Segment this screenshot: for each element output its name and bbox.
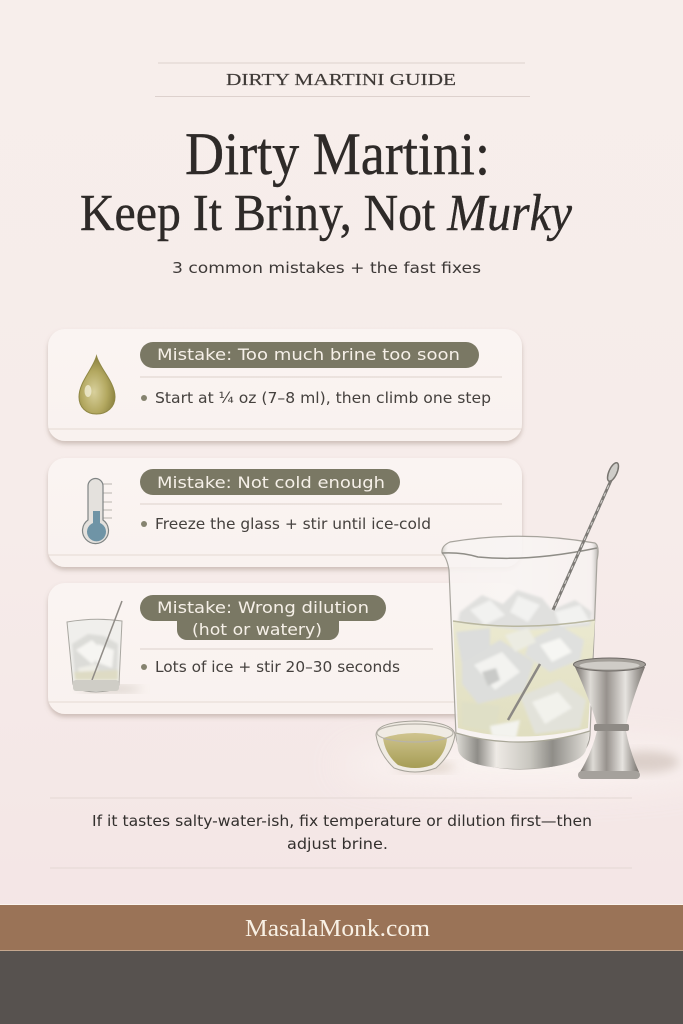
mistake pill 2 bbox=[140, 469, 400, 495]
footer note: adjust brine. bbox=[287, 835, 388, 853]
mixing glass bbox=[442, 536, 598, 769]
glass base bbox=[456, 731, 590, 769]
mistake pill 2: Mistake: Not cold enough bbox=[157, 473, 385, 492]
bar spoon bbox=[508, 461, 621, 720]
jigger bbox=[574, 658, 646, 779]
title: Dirty Martini: bbox=[185, 121, 490, 187]
panel: mistake 2, not cold enough bbox=[48, 458, 522, 567]
mistake pill 1 bbox=[140, 342, 479, 368]
fix text 3: Lots of ice + stir 20–30 seconds bbox=[155, 658, 400, 676]
mistake pill 3 bbox=[140, 595, 386, 640]
illustration: mixing glass, spoon, jigger and brine bowl bbox=[376, 461, 679, 779]
header label: Dirty Martini Guide: DIRTY MARTINI GUIDE bbox=[226, 70, 456, 89]
fix text 2: Freeze the glass + stir until ice-cold bbox=[155, 515, 431, 533]
ice cubes bbox=[456, 590, 592, 738]
panel: mistake 1, too much brine bbox=[48, 329, 522, 441]
dark footer bar bbox=[0, 951, 683, 1024]
icon: small mixing glass bbox=[67, 601, 142, 692]
mistake pill 1: Mistake: Too much brine too soon bbox=[157, 345, 460, 364]
icon: thermometer bbox=[83, 479, 112, 544]
mistake pill 3: Mistake: Wrong dilution bbox=[157, 598, 369, 617]
icon: brine drop bbox=[79, 356, 115, 414]
table shadow bbox=[611, 751, 679, 773]
title: Keep It Briny, Not Murky bbox=[80, 185, 573, 242]
panel: mistake 3, wrong dilution bbox=[48, 583, 522, 714]
brand band: MasalaMonk.com bbox=[245, 915, 430, 942]
brine bowl bbox=[376, 721, 455, 772]
footer note: If it tastes salty-water-ish, fix temperature or dilution first—then bbox=[92, 812, 592, 830]
title bbox=[80, 121, 573, 242]
table surface glow bbox=[340, 743, 683, 787]
brand band bbox=[0, 904, 683, 951]
footer note bbox=[50, 798, 632, 868]
mistake pill 3: (hot or watery) bbox=[192, 620, 322, 639]
subtitle: 3 common mistakes + the fast fixes bbox=[172, 259, 481, 277]
fix text 1: Start at ¼ oz (7–8 ml), then climb one step bbox=[155, 389, 491, 407]
